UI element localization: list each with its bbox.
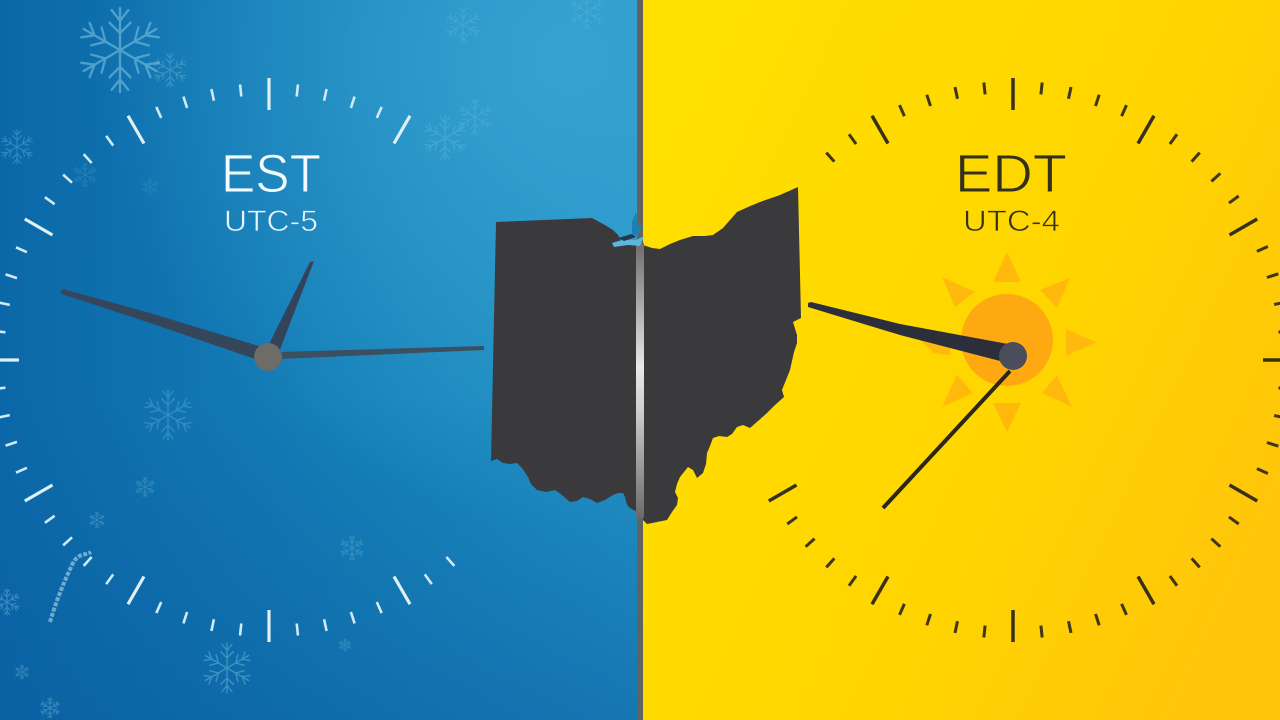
heading: EST: EST [221, 144, 321, 204]
clock hands: EST [60, 261, 484, 371]
divider: steel centre [636, 243, 644, 518]
clock face ticks: EST [0, 78, 454, 642]
divider: top segment [637, 0, 643, 245]
map: Ohio silhouette [491, 187, 801, 524]
divider: bottom segment [637, 515, 643, 720]
lake erie detail [612, 212, 644, 247]
panel: summer yellow background [640, 0, 1280, 720]
label: UTC-4: UTC-4 [963, 205, 1060, 238]
heading: EDT: EDT [955, 144, 1067, 204]
snowflakes [0, 0, 605, 718]
panel: winter blue background [0, 0, 640, 720]
label: UTC-5: UTC-5 [224, 205, 318, 238]
clock hands: EDT [808, 302, 1027, 508]
icon: sun [920, 252, 1096, 432]
clock face ticks: EDT [769, 78, 1280, 642]
